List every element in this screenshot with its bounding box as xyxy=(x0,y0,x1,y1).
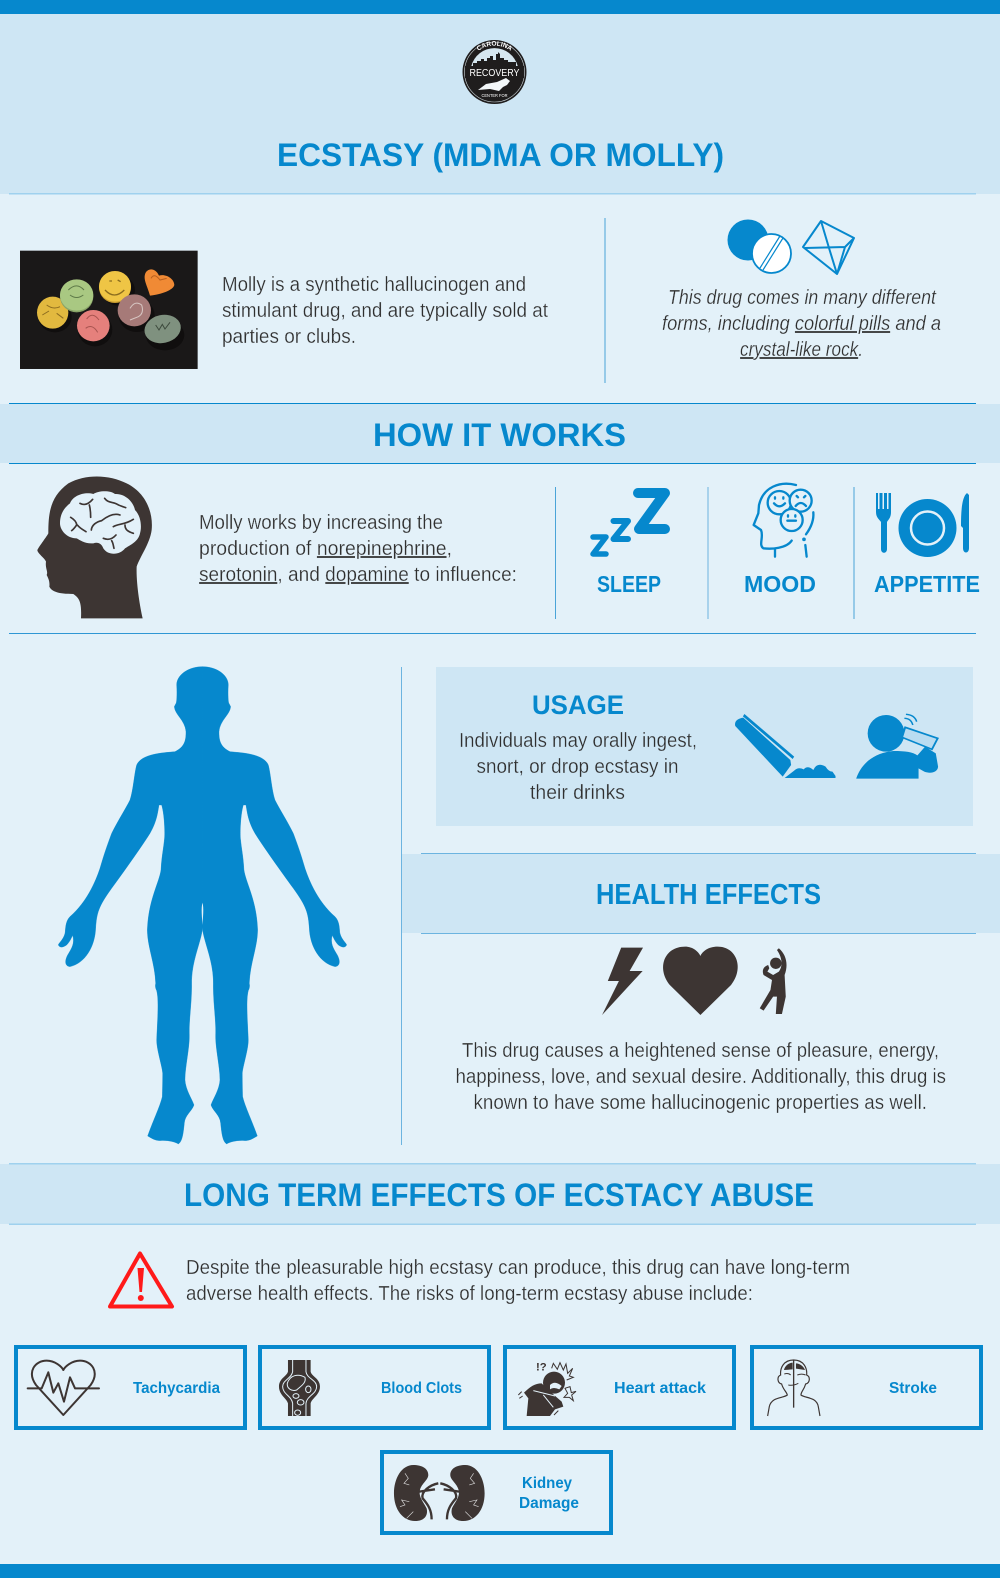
top bar xyxy=(0,0,1000,14)
text: what is Molly: stimulant drug, and are typically sold at xyxy=(222,300,548,322)
panel: long term effects xyxy=(0,1163,1000,1533)
card: blood clots xyxy=(260,1347,489,1428)
icon: person having heart attack xyxy=(518,1362,576,1416)
panel: usage xyxy=(436,667,973,826)
bottom bar xyxy=(0,1564,1000,1578)
label: kidney damage xyxy=(519,1475,579,1512)
text: how Molly works: Molly works by increasing the xyxy=(199,512,443,534)
logo: Carolina Recovery Center: CENTER FOR xyxy=(482,93,508,98)
card: tachycardia xyxy=(16,1347,245,1428)
heading: health effects: HEALTH EFFECTS xyxy=(596,879,821,911)
icon: mood head with faces xyxy=(754,484,813,557)
text: usage description: snort, or drop ecstasy in xyxy=(476,756,678,778)
icon: crystal rock xyxy=(803,221,854,274)
card: kidney damage xyxy=(382,1452,611,1533)
text: how Molly works: serotonin, and dopamine to influence: xyxy=(199,564,517,586)
text: how Molly works: production of norepinephrine, xyxy=(199,538,452,560)
icon: heart xyxy=(663,947,738,1015)
title: ECSTASY (MDMA OR MOLLY) xyxy=(277,137,724,173)
icon: appetite plate and cutlery xyxy=(876,493,969,557)
text: usage description xyxy=(459,730,697,804)
icon: warning triangle xyxy=(110,1254,172,1306)
text: forms of the drug: forms, including colorful pills and a xyxy=(662,313,941,335)
text: how Molly works xyxy=(199,512,517,586)
label: kidney damage: Kidney xyxy=(522,1475,572,1492)
panel: how it works xyxy=(0,403,1000,634)
text: what is Molly xyxy=(222,274,548,348)
label: stroke: Stroke xyxy=(889,1380,937,1397)
text: forms of the drug xyxy=(662,287,941,361)
text: health effects description: This drug causes a heightened sense of pleasure, energy, xyxy=(462,1040,939,1062)
logo: Carolina Recovery Center xyxy=(462,40,526,104)
logo: Carolina Recovery Center: CAROLINA xyxy=(476,41,512,51)
label: blood clots: Blood Clots xyxy=(381,1380,462,1397)
icon: heart with ECG xyxy=(28,1361,99,1415)
label: sleep: SLEEP xyxy=(597,571,661,597)
text: what is Molly: Molly is a synthetic hallucinogen and xyxy=(222,274,526,296)
label: kidney damage: Damage xyxy=(519,1495,579,1512)
text: usage description: Individuals may orally ingest, xyxy=(459,730,697,752)
photo: colorful ecstasy pills xyxy=(20,251,198,369)
text: long term intro xyxy=(186,1257,850,1305)
label: mood: MOOD xyxy=(744,571,816,597)
text: forms of the drug: This drug comes in many different xyxy=(668,287,937,309)
icon: pills xyxy=(728,220,791,273)
label: heart attack: Heart attack xyxy=(614,1380,706,1397)
icon: snorting straw and powder xyxy=(735,714,836,778)
icon: lightning bolt xyxy=(602,948,643,1015)
heading: long term effects: LONG TERM EFFECTS OF ECSTACY ABUSE xyxy=(184,1177,814,1213)
heading: how it works: HOW IT WORKS xyxy=(373,417,626,453)
card: heart attack xyxy=(505,1347,734,1428)
text: health effects description: known to have some hallucinogenic properties as well. xyxy=(474,1092,927,1114)
text: health effects description xyxy=(456,1040,946,1114)
label: tachycardia: Tachycardia xyxy=(133,1380,220,1397)
panel: intro xyxy=(20,218,941,383)
label: appetite: APPETITE xyxy=(874,571,980,597)
heading: usage: USAGE xyxy=(532,690,624,720)
icon: person having heart attack: !? xyxy=(536,1362,547,1374)
icon: dancing person xyxy=(760,948,787,1014)
card: stroke xyxy=(752,1347,981,1428)
text: forms of the drug: crystal-like rock. xyxy=(740,339,863,361)
icon: person drinking xyxy=(856,714,938,779)
text: long term intro: Despite the pleasurable high ecstasy can produce, this drug can have long-term xyxy=(186,1257,850,1279)
panel: header xyxy=(0,14,1000,194)
icon: head with brain xyxy=(37,476,152,618)
panel: health effects xyxy=(402,853,1000,1114)
icon: blood vessel with clots xyxy=(279,1360,320,1416)
icon: face with stroke xyxy=(768,1360,820,1416)
text: what is Molly: parties or clubs. xyxy=(222,326,356,348)
icon: damaged kidneys xyxy=(394,1465,485,1521)
text: health effects description: happiness, love, and sexual desire. Additionally, this drug is xyxy=(456,1066,946,1088)
icon: sleep zzz xyxy=(593,493,665,554)
figure: human body silhouette xyxy=(58,667,347,1144)
logo: Carolina Recovery Center: RECOVERY xyxy=(470,68,520,79)
text: usage description: their drinks xyxy=(530,782,625,804)
text: long term intro: adverse health effects. The risks of long-term ecstasy abuse include: xyxy=(186,1283,753,1305)
